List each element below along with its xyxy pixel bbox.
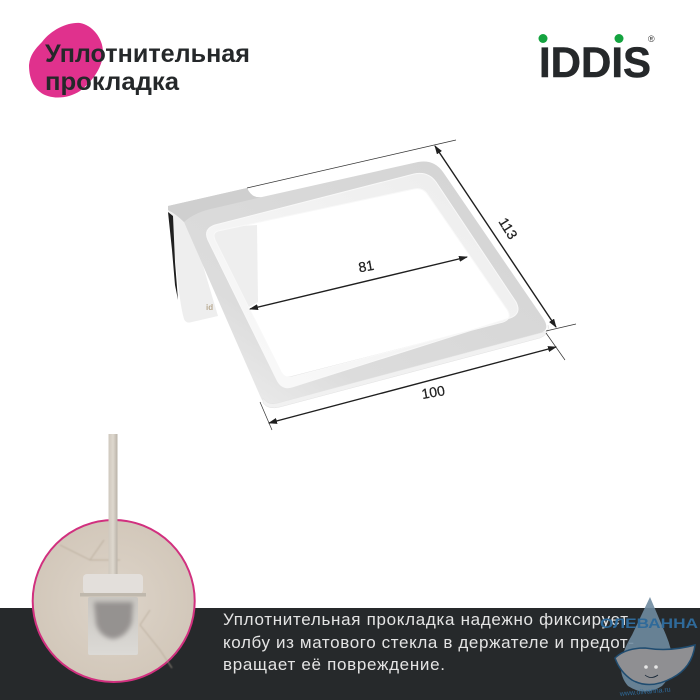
dimension 81: 81 xyxy=(357,257,375,275)
product: holder plate with gasket xyxy=(168,161,549,408)
dimension 113 xyxy=(435,146,556,327)
heading xyxy=(45,40,250,96)
sealing gasket xyxy=(207,173,518,388)
description text: Уплотнительная прокладка надежно фиксирует xyxy=(223,610,628,629)
dark footer band xyxy=(0,608,700,700)
glass cup xyxy=(88,597,138,655)
logo: IDDIS: IDDIS xyxy=(539,39,651,87)
brush head lid xyxy=(83,574,143,594)
description text: вращает её повреждение. xyxy=(223,655,445,674)
description text xyxy=(223,610,634,674)
marble veins xyxy=(60,540,172,668)
wall mount xyxy=(168,208,218,323)
dimension 100: 100 xyxy=(420,382,446,402)
plate xyxy=(168,161,546,404)
bristles xyxy=(94,602,133,639)
heading: Уплотнительная xyxy=(45,40,250,68)
wall mount dark edge xyxy=(168,212,178,300)
brush rod xyxy=(108,434,118,576)
heading: прокладка xyxy=(45,68,180,96)
backplate seen through opening xyxy=(210,225,258,312)
watermark: water drop and bathtub: www.olivanna.ru xyxy=(619,687,671,698)
plate lower edge xyxy=(263,325,549,408)
dimension lines xyxy=(247,140,576,430)
watermark: water drop and bathtub xyxy=(600,597,698,698)
dimension 113: 113 xyxy=(496,215,521,242)
lifestyle photo circle with brush holder xyxy=(33,434,195,682)
dimension 100 xyxy=(269,347,556,423)
logo: IDDIS: ® xyxy=(648,34,655,44)
plate darker rear band xyxy=(168,188,262,222)
watermark: water drop and bathtub: ОЛЕВАННА xyxy=(600,615,698,631)
bracket xyxy=(80,593,146,596)
description text: колбу из матового стекла в держателе и предот- xyxy=(223,633,634,652)
dimension 81 xyxy=(250,257,467,309)
heading accent blob xyxy=(29,23,103,98)
wall mount logo mark: id xyxy=(206,303,213,312)
